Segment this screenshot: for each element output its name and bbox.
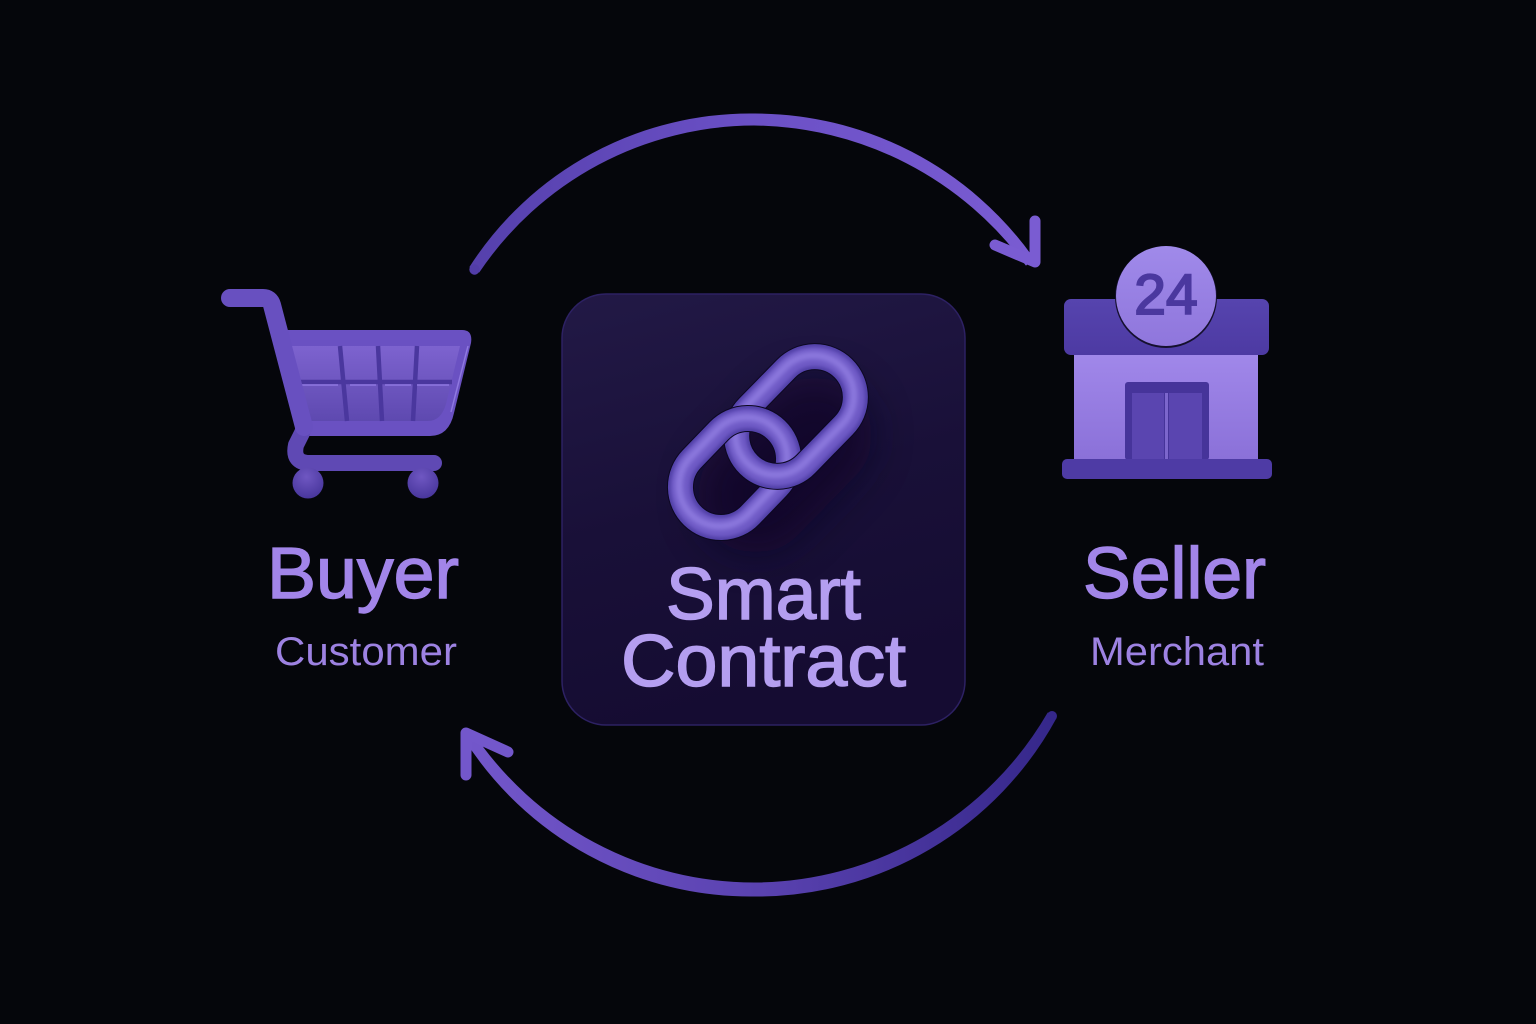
arrow: seller to buyer (bottom arc) xyxy=(464,711,1057,896)
icon: 24-hour store: 24 xyxy=(1134,263,1198,327)
icon: shopping cart xyxy=(230,298,471,498)
heading: smart contract: Smart xyxy=(666,554,861,635)
arrow: buyer to seller (top arc) xyxy=(469,114,1035,275)
label: seller: Seller xyxy=(1083,534,1266,614)
label: merchant: Merchant xyxy=(1090,630,1264,674)
label: buyer: Buyer xyxy=(267,534,459,614)
label: customer: Customer xyxy=(275,630,457,674)
icon: chain link xyxy=(667,343,869,546)
icon: 24-hour store xyxy=(1062,246,1272,479)
heading: smart contract: Contract xyxy=(621,621,906,702)
panel: smart contract xyxy=(562,294,965,725)
